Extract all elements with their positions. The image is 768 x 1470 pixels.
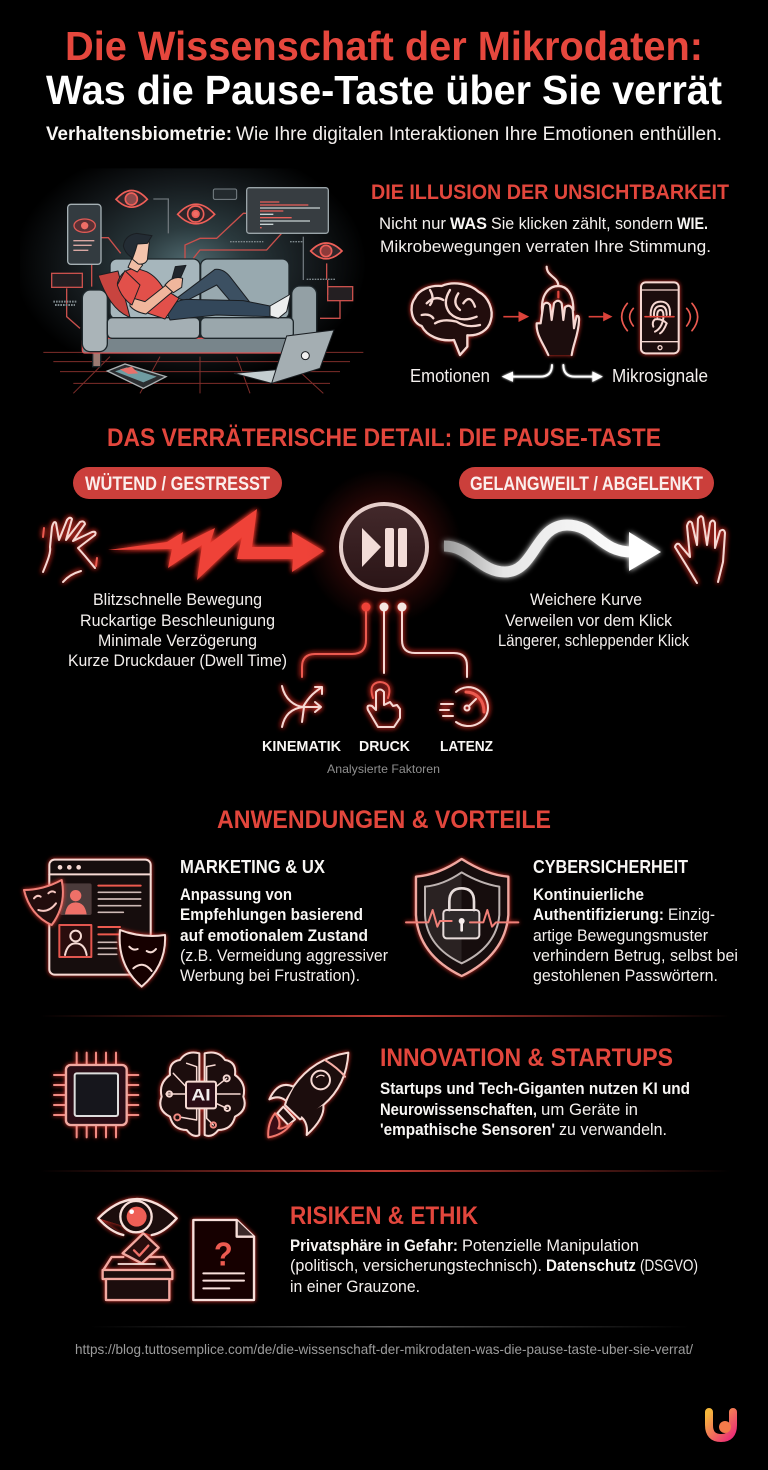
pill: wütend [73, 467, 282, 499]
text: angry characteristics: Ruckartige Beschleunigung [80, 611, 275, 630]
card text: cybersecurity: gestohlenen Passwörtern. [533, 967, 718, 985]
text: innovation and startups: INNOVATION & STARTUPS [380, 1044, 673, 1072]
pill: wütend: WÜTEND / GESTRESST [85, 474, 270, 495]
arm [130, 285, 173, 314]
section: Die Illusion der Unsichtbarkeit [371, 181, 729, 256]
raised leg [177, 269, 251, 303]
neck [128, 258, 143, 272]
illustration: man on sofa surrounded by digital eyes [20, 168, 380, 402]
pause button [306, 469, 462, 625]
text: innovation and startups [380, 1044, 690, 1139]
labels: factors [262, 738, 493, 755]
icon: tense hand [43, 518, 97, 582]
laptop [234, 330, 334, 383]
diagram: emotions to micro signals [412, 267, 698, 380]
source url: https://blog.tuttosemplice.com/de/die-wissenschaft-der-mikrodaten-was-die-pause-taste-uber-sie-verrat/ [75, 1341, 693, 1357]
text: innovation and startups: Neurowissenschaften, [380, 1101, 537, 1119]
text block: Sie klicken zählt, sondern [491, 214, 673, 233]
icon: press finger [368, 682, 400, 727]
white arrows [504, 365, 601, 380]
text block: Nicht nur [379, 214, 446, 233]
text: risks and ethics [290, 1202, 698, 1296]
text block: WIE. [677, 214, 708, 233]
question mark: ? [214, 1237, 233, 1274]
title: Was die Pause-Taste über Sie verrät [46, 67, 722, 113]
text: innovation and startups: 'empathische Sensoren' [380, 1121, 555, 1139]
card text: cybersecurity: Kontinuierliche [533, 886, 644, 904]
subtitle: Wie Ihre digitalen Interaktionen Ihre Emotionen enthüllen. [236, 124, 722, 145]
sock [270, 294, 291, 318]
subtitle: Verhaltensbiometrie: [46, 124, 232, 145]
text: angry characteristics: Blitzschnelle Bewegung [93, 590, 262, 609]
card text: cybersecurity: Einzig- [668, 906, 715, 924]
text: angry characteristics: Minimale Verzögerung [98, 631, 257, 650]
text block: Mikrobewegungen verraten Ihre Stimmung. [380, 237, 711, 256]
phone [172, 265, 186, 281]
icon: hand on mouse [537, 267, 579, 355]
labels: factors: KINEMATIK [262, 738, 341, 755]
text: risks and ethics: (politisch, versicherungstechnisch). [290, 1257, 542, 1275]
arrow: jagged red [108, 509, 324, 580]
icon: rocket [268, 1053, 348, 1137]
torso [117, 268, 179, 319]
arrow: red [503, 313, 527, 321]
code panel [247, 188, 328, 233]
pill: gelangweilt [459, 467, 714, 499]
icon: relaxed hand [675, 516, 725, 583]
labels: factors: LATENZ [440, 738, 493, 755]
labels: factors: DRUCK [359, 738, 410, 755]
text: innovation and startups: zu verwandeln. [559, 1121, 667, 1139]
text: bored characteristics [498, 590, 689, 650]
icon: AI brain [160, 1052, 245, 1136]
title: Die Wissenschaft der Mikrodaten: [65, 23, 703, 69]
flat leg [167, 299, 270, 320]
icon: brain [412, 283, 492, 355]
card text: cybersecurity: CYBERSICHERHEIT [533, 857, 688, 877]
arrow: smooth white wave [444, 525, 661, 572]
card text: cybersecurity: Authentifizierung: [533, 906, 664, 924]
floating eyes [116, 190, 342, 259]
logo [709, 1412, 733, 1438]
icon: kinematics [282, 686, 322, 727]
icon: phone with fingerprint [641, 282, 679, 353]
icon: document with question mark [193, 1220, 254, 1300]
title [46, 23, 722, 113]
card text: marketing: auf emotionalem Zustand [180, 927, 368, 945]
text: risks and ethics: Privatsphäre in Gefahr: [290, 1237, 458, 1255]
icon: chip [54, 1053, 138, 1137]
head [132, 241, 149, 264]
text: risks and ethics: (DSGVO) [640, 1257, 698, 1275]
data traces [52, 199, 353, 328]
pillow [98, 271, 130, 317]
sofa [82, 259, 317, 367]
phone floating [68, 204, 101, 264]
connectors to factors [302, 602, 467, 677]
icon: browser window with masks [24, 860, 165, 987]
floor grid [43, 352, 363, 393]
card text: marketing: MARKETING & UX [180, 857, 325, 877]
text: innovation and startups: um Geräte in [541, 1101, 638, 1119]
label: Mikrosignale: Mikrosignale [612, 366, 708, 386]
icons: risks [98, 1199, 254, 1300]
icon: latency gauge [440, 687, 488, 726]
text: innovation and startups: Startups und Tech-Giganten nutzen KI und [380, 1080, 690, 1098]
hand [165, 277, 183, 293]
text block: WAS [450, 214, 487, 233]
hair [123, 233, 152, 258]
card text: cybersecurity: artige Bewegungsmuster [533, 927, 708, 945]
sleeve [117, 271, 140, 305]
text: risks and ethics: RISIKEN & ETHIK [290, 1202, 478, 1230]
icons: innovation [54, 1052, 348, 1137]
text: risks and ethics: Datenschutz [546, 1257, 636, 1275]
text: bored characteristics: Längerer, schleppender Klick [498, 631, 689, 650]
label: Emotionen: Emotionen [410, 366, 490, 386]
card text: marketing [180, 857, 388, 985]
heading: DIE ILLUSION DER UNSICHTBARKEIT [371, 181, 729, 204]
small bubble [213, 189, 237, 199]
text: bored characteristics: Verweilen vor dem Klick [505, 611, 672, 630]
icon: shield with padlock [406, 859, 518, 976]
icon: eye with ballot box [98, 1199, 177, 1300]
text block [379, 214, 711, 256]
card text: marketing: (z.B. Vermeidung aggressiver [180, 947, 388, 965]
text: angry characteristics [68, 590, 287, 670]
caption: analysed factors: Analysierte Faktoren [327, 762, 440, 776]
tablet [107, 364, 166, 388]
pill: gelangweilt: GELANGWEILT / ABGELENKT [470, 474, 703, 495]
label: AI: AI [191, 1086, 211, 1105]
card text: cybersecurity [533, 857, 738, 985]
text: risks and ethics: in einer Grauzone. [290, 1278, 420, 1296]
heading: Anwendungen und Vorteile: ANWENDUNGEN & VORTEILE [217, 806, 551, 834]
text: angry characteristics: Kurze Druckdauer (Dwell Time) [68, 651, 287, 670]
signal waves [622, 303, 698, 331]
text: bored characteristics: Weichere Kurve [530, 590, 642, 609]
person [98, 233, 291, 320]
card text: marketing: Empfehlungen basierend [180, 906, 363, 924]
card text: marketing: Anpassung von [180, 886, 292, 904]
card text: cybersecurity: verhindern Betrug, selbst bei [533, 947, 738, 965]
heading: Das verräterische Detail: DAS VERRÄTERISCHE DETAIL: DIE PAUSE-TASTE [107, 424, 661, 452]
text: risks and ethics: Potenzielle Manipulation [462, 1237, 639, 1255]
card text: marketing: Werbung bei Frustration). [180, 967, 360, 985]
arrow: red [589, 313, 611, 320]
